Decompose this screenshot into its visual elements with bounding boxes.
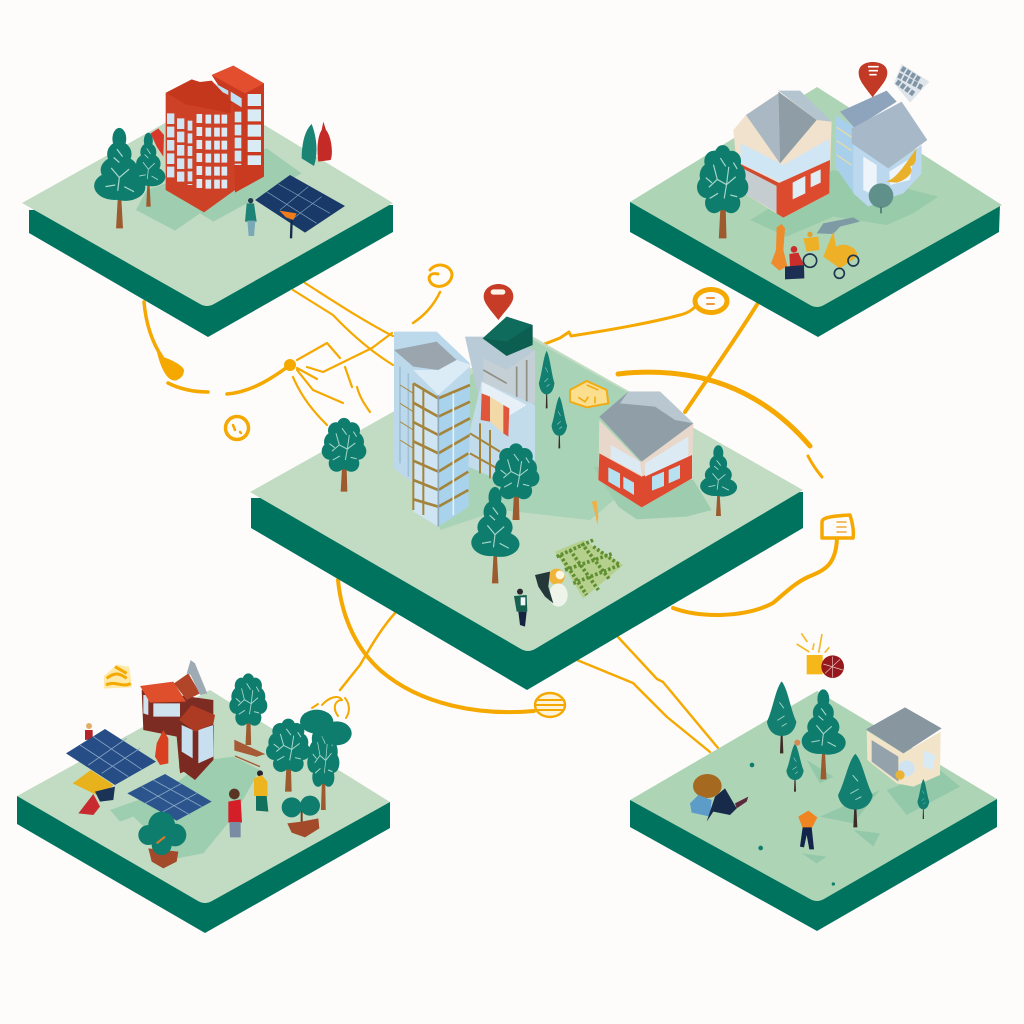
slab top xyxy=(22,95,393,306)
bush and figure right xyxy=(302,122,332,166)
tree small xyxy=(786,744,804,792)
back tower xyxy=(465,337,535,403)
slab side xyxy=(17,796,390,933)
potted small tree xyxy=(282,796,320,837)
house in centre platform xyxy=(593,392,712,519)
connector bottom diagonal xyxy=(340,613,395,690)
golden sprig marker xyxy=(592,501,598,525)
yellow scooter xyxy=(823,232,859,278)
scene: centre xyxy=(322,284,737,627)
connector droplet xyxy=(157,352,184,381)
small person by panel xyxy=(85,723,93,740)
person yellow xyxy=(254,770,268,812)
house walls xyxy=(598,420,693,507)
tree right canopy xyxy=(300,710,352,745)
coin stack xyxy=(535,693,565,717)
arc right xyxy=(618,372,810,446)
potted shrub xyxy=(138,812,186,868)
figures with golden canopy xyxy=(690,774,748,822)
yellow awning xyxy=(73,770,113,797)
connectors from top left platform xyxy=(293,283,393,365)
connectors lower right xyxy=(577,637,718,752)
ground shadow xyxy=(110,757,260,858)
hedge xyxy=(555,540,623,598)
connector from top icon xyxy=(413,292,440,323)
flame accent xyxy=(886,148,917,183)
colourful cluster at shed xyxy=(895,760,915,780)
red figure behind tree xyxy=(151,128,164,157)
slab side xyxy=(29,205,393,337)
icon ring left xyxy=(226,416,248,440)
glowing burst xyxy=(549,569,568,607)
shed shadow and soft patches xyxy=(802,760,960,863)
orange cube icon xyxy=(570,381,608,407)
icon dots left xyxy=(233,425,241,433)
tree right xyxy=(307,724,339,810)
junction burst xyxy=(284,359,296,371)
tree small xyxy=(132,133,165,207)
map pin xyxy=(484,284,513,320)
tree behind house xyxy=(229,673,267,745)
platform: top right xyxy=(630,62,1002,337)
tree middle xyxy=(266,719,311,792)
house with tower xyxy=(140,660,215,780)
darker lawn near buildings xyxy=(430,338,650,530)
panel stand figure xyxy=(279,211,297,238)
stepping stones xyxy=(817,217,860,234)
scene: top right xyxy=(697,62,938,279)
scene: bottom left xyxy=(66,660,352,868)
main tower xyxy=(394,332,472,527)
solar panel xyxy=(255,175,345,233)
sun icon xyxy=(797,633,844,678)
dark roof box xyxy=(483,317,533,356)
platform: bottom right xyxy=(630,633,997,931)
tree xyxy=(697,145,748,238)
tree xyxy=(767,681,796,753)
slab side xyxy=(630,799,997,931)
slab side xyxy=(630,202,1000,337)
map pin xyxy=(859,62,887,97)
orange shirt person xyxy=(798,811,817,849)
ring icon top right xyxy=(695,290,727,312)
solar panel large xyxy=(66,729,156,785)
slab top xyxy=(630,691,997,901)
person xyxy=(245,198,257,236)
tree xyxy=(94,128,145,228)
document icon xyxy=(822,515,853,538)
slab top xyxy=(17,690,390,903)
slab top xyxy=(630,87,1002,307)
person red xyxy=(228,789,242,837)
tree left xyxy=(322,418,366,492)
connector to top right ring xyxy=(537,306,696,347)
tree centre xyxy=(493,443,539,520)
ground shadow xyxy=(750,170,938,237)
shed xyxy=(866,707,942,787)
connector: top left platform to burst xyxy=(144,302,290,394)
red tower front xyxy=(166,79,235,212)
orange icon xyxy=(104,665,132,689)
tree narrow xyxy=(552,396,567,448)
round bush xyxy=(869,183,893,213)
platform: top left xyxy=(22,66,393,337)
connector from top right platform xyxy=(685,303,758,412)
person red xyxy=(785,246,804,279)
house two xyxy=(835,91,927,207)
arc bottom xyxy=(338,580,534,712)
solar panel small xyxy=(127,774,212,821)
tree front xyxy=(471,487,520,583)
slab side xyxy=(251,492,803,690)
tree lower xyxy=(838,754,873,827)
seated people xyxy=(535,572,553,603)
tree xyxy=(802,689,846,779)
connector branches xyxy=(293,333,392,425)
connector lower right to document xyxy=(673,538,837,615)
ring icon marks xyxy=(707,298,714,304)
platform: centre xyxy=(250,284,803,690)
connector lines xyxy=(144,265,853,752)
icon ring top xyxy=(429,265,452,286)
orange obelisk xyxy=(771,224,787,271)
bicycle xyxy=(803,232,819,267)
house one xyxy=(733,91,832,218)
ground shadow xyxy=(593,467,712,519)
document lines xyxy=(837,522,846,532)
building shadow xyxy=(136,148,302,231)
tree near shed xyxy=(917,779,929,819)
scene: bottom right xyxy=(690,633,960,886)
red tower back xyxy=(212,66,264,193)
house roof xyxy=(599,392,693,462)
scattered dots xyxy=(750,763,835,886)
front annex xyxy=(468,382,535,483)
tree right xyxy=(700,445,737,516)
person with clipboard xyxy=(514,589,527,627)
grey pattern icon xyxy=(894,64,929,103)
seated figure with red scarf xyxy=(78,787,115,815)
bench xyxy=(235,741,263,767)
swirl bottom left xyxy=(312,697,349,718)
slab top xyxy=(250,335,803,651)
scene: top left xyxy=(94,66,345,238)
small orange figure xyxy=(794,740,800,746)
person red coat xyxy=(155,730,168,765)
platform: bottom left xyxy=(17,660,390,933)
arc right end xyxy=(808,456,822,477)
tree narrow back xyxy=(539,351,554,408)
